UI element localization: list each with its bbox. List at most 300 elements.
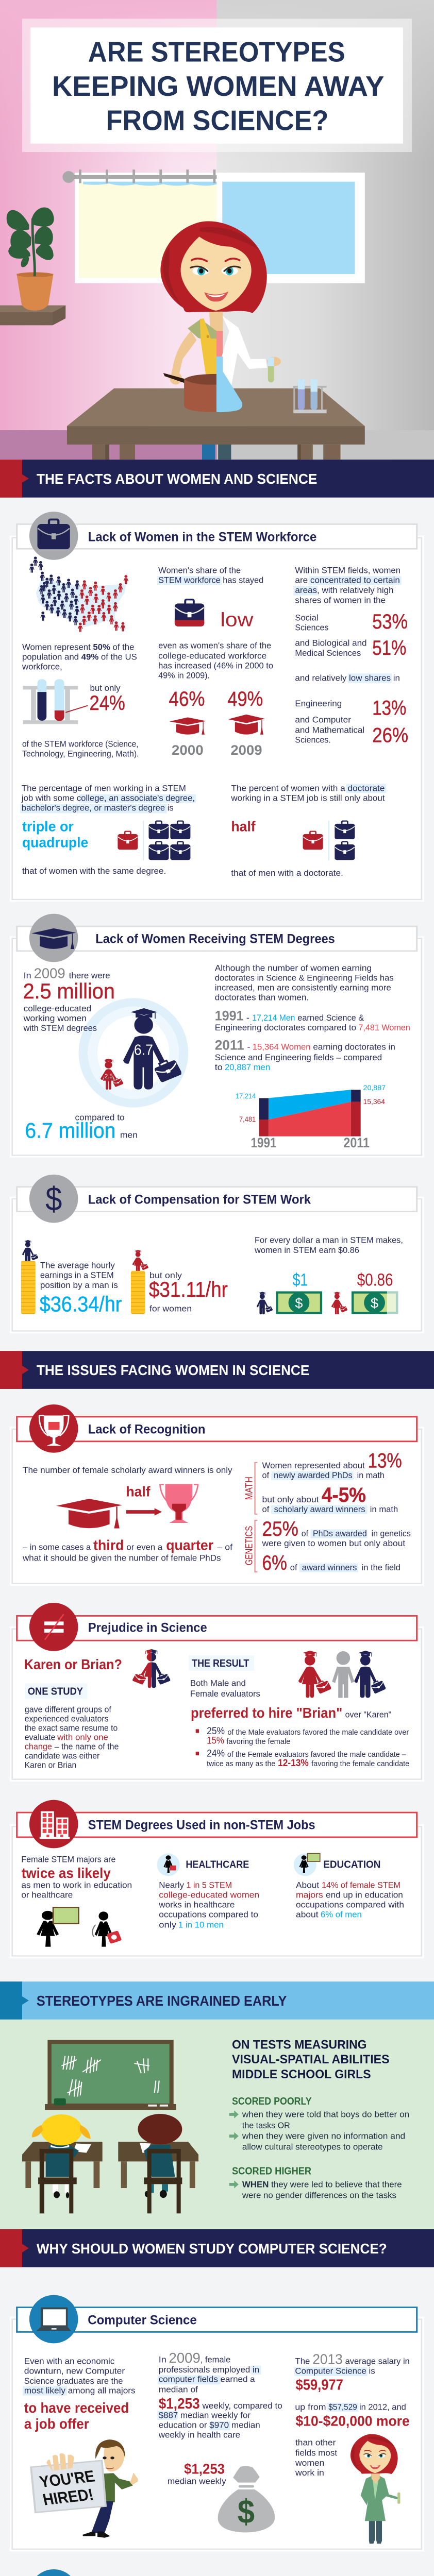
coins: man earnings bbox=[21, 1240, 122, 1316]
text: scored higher: were no gender differences on the tasks bbox=[242, 2191, 396, 2200]
text: preferred to hire Brian bbox=[191, 1705, 409, 1769]
icon: test tubes bbox=[23, 679, 88, 724]
text: doctorates: 1991 bbox=[215, 1008, 244, 1024]
text: 2013 salary: 2013 bbox=[312, 2351, 343, 2367]
text: scored poorly: allow cultural stereotypes to operate bbox=[242, 2142, 383, 2151]
text: concentrated fields: and Biological and bbox=[295, 638, 367, 648]
text: concentrated fields: 13% bbox=[372, 697, 406, 719]
text: health care: weekly in health care bbox=[158, 2431, 240, 2440]
text: scored higher bbox=[229, 2165, 402, 2200]
area chart: doctorates 1991 to 2011: 20,887 bbox=[363, 1084, 386, 1092]
text: than other fields: than other bbox=[295, 2438, 336, 2448]
genetics column: 6% bbox=[262, 1551, 287, 1574]
character: half home half scientist bbox=[170, 308, 281, 460]
text: doctorates: 15,364 Women bbox=[253, 1042, 311, 1052]
text: median weekly earnings: median of bbox=[159, 2384, 198, 2394]
text: doctorates: 17,214 Men bbox=[252, 1013, 295, 1023]
desks bbox=[22, 2142, 198, 2188]
title: ARE STEREOTYPES bbox=[88, 36, 345, 67]
dollar comparison: $1 bbox=[293, 1269, 308, 1290]
text: than other fields: fields most bbox=[295, 2449, 337, 2458]
panel: lack of recognition bbox=[10, 1404, 424, 1586]
title: KEEPING WOMEN AWAY bbox=[52, 70, 384, 102]
heading: tests bbox=[232, 2038, 390, 2081]
text: doctorates: 7,481 Women bbox=[358, 1023, 410, 1032]
healthcare column: 1 in 5 STEM bbox=[186, 1880, 232, 1890]
text: median weekly earnings: professionals employed in bbox=[159, 2365, 259, 2375]
panel header bbox=[17, 2308, 417, 2332]
text: median weekly earnings: computer fields earned a bbox=[159, 2374, 255, 2384]
text: doctorates: doctorates than women. bbox=[215, 992, 309, 1002]
stat: money bag: $1,253 bbox=[184, 2462, 225, 2477]
figure: man and woman scale: 2.5 bbox=[105, 1073, 113, 1080]
heading: Karen or Brian: Karen or Brian? bbox=[24, 1657, 122, 1673]
text: STEM share stayed low: low bbox=[220, 608, 254, 631]
stat: money bag: $ bbox=[238, 2493, 255, 2530]
panel: prejudice in science bbox=[10, 1603, 424, 1782]
stat: 2.5 million bbox=[23, 965, 115, 1033]
text: doctorates: Engineering doctorates compared to bbox=[215, 1023, 356, 1032]
text: doctorates: Although the number of women earning bbox=[215, 963, 372, 973]
icon: teacher and doctor bbox=[37, 1907, 122, 1947]
text: women population share: workforce, bbox=[22, 662, 62, 671]
text: men triple or quadruple: quadruple bbox=[22, 835, 88, 851]
dollar comparison: For every dollar a man in STEM makes, bbox=[255, 1235, 403, 1245]
dollar comparison: $ bbox=[295, 1296, 303, 1311]
text: doctorates: increased, men are consistently earning more bbox=[215, 982, 391, 992]
healthcare column: 1 in 10 men bbox=[178, 1920, 224, 1929]
text: preferred to hire Brian: favoring the female bbox=[226, 1738, 290, 1746]
text: scored poorly bbox=[229, 2095, 409, 2151]
text: preferred to hire Brian: of the Male evaluators favored the male candidate over bbox=[227, 1728, 409, 1737]
window bbox=[62, 170, 365, 283]
education column: EDUCATION bbox=[323, 1859, 380, 1870]
title: FROM SCIENCE? bbox=[106, 105, 328, 136]
text: doctorates: 2011 bbox=[215, 1038, 244, 1053]
panel: lack of women receiving STEM degrees bbox=[10, 914, 424, 1158]
text: 2013 salary: The bbox=[295, 2356, 310, 2366]
text: award winners: what it should be given the number of female PhDs bbox=[22, 1553, 221, 1563]
hero illustration bbox=[0, 0, 434, 460]
icon: not equal bbox=[29, 1603, 78, 1651]
math column bbox=[243, 1449, 402, 1514]
text: median weekly earnings: , female bbox=[201, 2355, 230, 2364]
text: twice as likely bbox=[21, 1855, 132, 1900]
icon: laptop bbox=[29, 2295, 78, 2343]
genetics column: of award winners in the field bbox=[290, 1563, 400, 1572]
text: STEM share stayed low bbox=[157, 566, 273, 680]
panel: classroom section bbox=[0, 2020, 434, 2229]
text: median weekly earnings: $1,253 bbox=[159, 2396, 200, 2412]
panel header: Lack of Compensation for STEM Work bbox=[88, 1192, 311, 1207]
text: concentrated fields: and Mathematical bbox=[295, 725, 364, 735]
text: the result: Female evaluators bbox=[190, 1689, 260, 1699]
text: concentrated fields: Within STEM fields, women bbox=[295, 566, 400, 575]
stat: 2000 vs 2009 caps: 2000 bbox=[172, 743, 204, 758]
text: scored poorly: when they were given no information and bbox=[242, 2131, 405, 2141]
text: concentrated fields: 53% bbox=[372, 610, 408, 633]
text: scored higher: WHEN they were led to believe that there bbox=[242, 2180, 402, 2189]
dollar comparison: women in STEM earn $0.86 bbox=[254, 1245, 359, 1255]
panel header bbox=[17, 1417, 417, 1442]
text: 2013 salary: $59,977 bbox=[296, 2377, 343, 2393]
education column: about bbox=[296, 1909, 319, 1919]
text: median weekly earnings bbox=[158, 2350, 282, 2420]
coins: man earnings: earnings in a STEM bbox=[40, 1270, 114, 1280]
stat: 6.7 million: compared to bbox=[75, 1112, 125, 1122]
section band: issues bbox=[0, 1351, 434, 1389]
panel header bbox=[17, 524, 417, 549]
text: award winners: half bbox=[126, 1484, 151, 1500]
boy student bbox=[138, 2114, 182, 2198]
text: concentrated fields: areas, with relatively high bbox=[295, 585, 394, 595]
coins: woman earnings: for women bbox=[149, 1304, 192, 1313]
education column: 14% of female STEM bbox=[322, 1880, 400, 1890]
stat: 2.5 million: 2.5 million bbox=[23, 979, 115, 1004]
text: concentrated fields: Sciences. bbox=[295, 735, 331, 744]
text: preferred to hire Brian: 24% bbox=[207, 1749, 225, 1759]
text: health care bbox=[158, 2421, 260, 2440]
icon: trophy bbox=[29, 1404, 78, 1453]
area chart: doctorates 1991 to 2011: 17,214 bbox=[236, 1093, 256, 1100]
stat: 2000 vs 2009 caps: 2009 bbox=[230, 743, 262, 758]
panel: STEM degrees in non-STEM jobs bbox=[10, 1800, 424, 1958]
text: 2013 salary bbox=[294, 2351, 410, 2412]
heading: tests: VISUAL-SPATIAL ABILITIES bbox=[232, 2053, 390, 2066]
text: concentrated fields: and Computer bbox=[295, 715, 351, 724]
text: preferred to hire Brian: of the Female evaluators favored the male candidate – bbox=[227, 1751, 406, 1759]
stat: 2000 vs 2009 caps: 49% bbox=[227, 687, 263, 710]
panel header: Lack of Women in the STEM Workforce bbox=[88, 530, 316, 544]
panel header bbox=[17, 1812, 417, 1837]
section band: why computer science bbox=[0, 2229, 434, 2267]
text: doctorate half bbox=[230, 783, 386, 878]
text: doctorates: - bbox=[246, 1013, 249, 1023]
text: job offer bbox=[23, 2356, 136, 2416]
text: one study: ONE STUDY bbox=[28, 1686, 83, 1697]
text: the result: THE RESULT bbox=[192, 1657, 249, 1669]
text: than other fields bbox=[295, 2438, 337, 2478]
icon: briefcase bbox=[29, 512, 78, 560]
text: job offer: Science graduates are the bbox=[24, 2376, 123, 2386]
illustration: hired man: HIRED! bbox=[41, 2485, 95, 2509]
text: than other fields: work in bbox=[295, 2468, 324, 2478]
stat: 24 percent: 24% bbox=[89, 691, 125, 715]
text: one study: candidate was either bbox=[25, 1751, 100, 1760]
dollar comparison: $ bbox=[371, 1296, 378, 1311]
area chart: doctorates 1991 to 2011 bbox=[236, 1084, 386, 1151]
education column: About bbox=[296, 1880, 319, 1890]
icon: dollar: $ bbox=[45, 1180, 62, 1218]
stat: 2.5 million: with STEM degrees bbox=[23, 1023, 97, 1033]
stat: money bag bbox=[168, 2462, 275, 2532]
text: one study: experienced evaluators bbox=[25, 1714, 109, 1723]
text: STEM share stayed low: STEM workforce has stayed bbox=[158, 575, 263, 585]
text: women population share: Women represent 50% of the bbox=[22, 642, 134, 652]
coins: man earnings: $36.34/hr bbox=[40, 1292, 122, 1316]
education column: end up in education bbox=[326, 1890, 403, 1900]
character head bbox=[160, 221, 267, 313]
dollar comparison: $0.86 bbox=[357, 1269, 393, 1290]
text: 2013 salary: average salary in bbox=[345, 2356, 410, 2366]
illustration: woman scientist bbox=[350, 2434, 400, 2544]
text: preferred to hire Brian: 25% bbox=[207, 1726, 225, 1737]
genetics column bbox=[243, 1517, 411, 1574]
text: concentrated fields: Sciences bbox=[295, 623, 329, 632]
text: concentrated fields: are concentrated to certain bbox=[295, 575, 400, 585]
text: preferred to hire Brian: over "Karen" bbox=[345, 1709, 391, 1719]
heading: tests: ON TESTS MEASURING bbox=[232, 2038, 367, 2052]
text: job offer: downturn, new Computer bbox=[24, 2366, 125, 2376]
icon: chart bbox=[29, 2569, 78, 2576]
text: 2013 salary: up from bbox=[295, 2402, 326, 2412]
text: men triple or quadruple bbox=[20, 783, 196, 876]
text: concentrated fields bbox=[293, 566, 408, 747]
text: one study: the exact same resume to bbox=[25, 1723, 118, 1733]
text: doctorates: earned Science & bbox=[297, 1013, 364, 1023]
math column: of newly awarded PhDs in math bbox=[262, 1470, 385, 1480]
plant in pot bbox=[7, 208, 54, 311]
text: scored poorly: the tasks OR bbox=[242, 2121, 290, 2130]
US map of people bbox=[29, 556, 128, 632]
math column: MATH bbox=[243, 1477, 255, 1500]
stat: 2.5 million: college-educated bbox=[24, 1004, 91, 1013]
education column: occupations compared with bbox=[296, 1900, 404, 1909]
text: men triple or quadruple: triple or bbox=[22, 819, 74, 835]
icon: graduation cap bbox=[29, 914, 78, 962]
text: job offer: Even with an economic bbox=[24, 2356, 115, 2366]
text: concentrated fields: Social bbox=[295, 613, 319, 622]
text: scored poorly: SCORED POORLY bbox=[232, 2095, 312, 2107]
stat: 2.5 million: In bbox=[24, 971, 31, 980]
text: twice as likely: twice as likely bbox=[22, 1865, 111, 1881]
stat: 24 percent: Technology, Engineering, Math). bbox=[22, 749, 139, 758]
panel header: Computer Science bbox=[88, 2313, 197, 2327]
panel: lack of women in the STEM workforce bbox=[10, 512, 424, 902]
text: doctorates: Science and Engineering fields – compared bbox=[215, 1053, 382, 1062]
coins: woman earnings: $31.11/hr bbox=[149, 1277, 228, 1301]
coins: woman earnings: but only bbox=[149, 1270, 182, 1280]
stat: 24 percent: but only bbox=[90, 683, 121, 693]
text: men triple or quadruple: that of women with the same degree. bbox=[22, 866, 166, 876]
text: men triple or quadruple: job with some college, an associate's degree, bbox=[21, 793, 195, 803]
text: one study: gave different groups of bbox=[25, 1704, 111, 1714]
healthcare column: occupations compared to bbox=[159, 1909, 258, 1919]
math column: 13% bbox=[368, 1449, 402, 1472]
section band: the facts bbox=[0, 460, 434, 498]
heading: tests: MIDDLE SCHOOL GIRLS bbox=[232, 2067, 371, 2081]
text: preferred to hire Brian: 12-13% bbox=[278, 1758, 309, 1769]
text: doctorate half: The percent of women with a doctorate bbox=[231, 783, 385, 793]
text: scored poorly: when they were told that boys do better on bbox=[242, 2110, 409, 2120]
text: doctorates: 20,887 men bbox=[225, 1062, 270, 1072]
title frame bbox=[22, 19, 412, 152]
stat: 2.5 million: there were bbox=[69, 971, 110, 980]
text: median weekly earnings: In bbox=[159, 2355, 166, 2364]
icon: half and half person bbox=[132, 1649, 171, 1688]
text: STEM share stayed low: college-educated workforce bbox=[158, 651, 266, 660]
stat: 2.5 million: 2009 bbox=[34, 965, 65, 981]
text: award winners: quarter bbox=[166, 1537, 213, 1553]
panel header bbox=[17, 1187, 417, 1211]
text: men triple or quadruple: bachelor's degree, or master's degree is bbox=[22, 803, 174, 812]
text: preferred to hire Brian: favoring the female candidate bbox=[311, 1760, 409, 1768]
section band: stereotypes bbox=[0, 1981, 434, 2020]
text: twice as likely: or healthcare bbox=[21, 1890, 73, 1900]
text: doctorates bbox=[215, 963, 410, 1072]
stat: 24 percent: of the STEM workforce (Science, bbox=[22, 739, 139, 749]
shelf bbox=[0, 306, 65, 325]
coins: woman earnings bbox=[131, 1250, 228, 1314]
genetics column: GENETICS bbox=[243, 1526, 255, 1565]
text: a job offer: a job offer bbox=[24, 2416, 89, 2432]
text: preferred to hire Brian: twice as many as the bbox=[207, 1760, 275, 1768]
coins: man earnings: The average hourly bbox=[40, 1260, 115, 1270]
text: concentrated fields: Engineering bbox=[295, 699, 342, 708]
figure: man and woman scale: 6.7 bbox=[134, 1042, 153, 1058]
text: one study: evaluate bbox=[25, 1732, 55, 1742]
illustration: hired man: YOU'RE bbox=[38, 2467, 96, 2491]
text: job offer: to have received bbox=[24, 2400, 129, 2416]
lower part of computer science panel bbox=[24, 2414, 410, 2544]
panel header: Lack of Recognition bbox=[88, 1422, 205, 1436]
text: concentrated fields: and relatively low shares in bbox=[295, 673, 400, 683]
pot and flask bbox=[163, 357, 242, 412]
genetics column: 25% bbox=[262, 1517, 298, 1540]
area chart: doctorates 1991 to 2011: 1991 bbox=[251, 1136, 277, 1151]
chairs bbox=[38, 2149, 182, 2213]
area chart: doctorates 1991 to 2011: 15,364 bbox=[363, 1098, 385, 1106]
healthcare column: works in healthcare bbox=[158, 1900, 235, 1909]
math column: 4-5% bbox=[322, 1483, 366, 1506]
healthcare column: college-educated women bbox=[159, 1890, 259, 1900]
text: twice as likely: Female STEM majors are bbox=[21, 1855, 115, 1864]
text: job offer: most likely among all majors bbox=[24, 2385, 136, 2395]
coins: man earnings: position by a man is bbox=[40, 1280, 118, 1290]
text: award winners: The number of female scholarly award winners is only bbox=[23, 1465, 232, 1475]
icon: three people bbox=[298, 1651, 386, 1698]
text: doctorate half: half bbox=[231, 819, 256, 835]
healthcare column: only bbox=[159, 1920, 176, 1929]
text: median weekly earnings: 2009 bbox=[169, 2350, 201, 2366]
text: concentrated fields: Medical Sciences bbox=[295, 648, 361, 658]
text: award winners: – of bbox=[218, 1543, 232, 1552]
math column: but only about bbox=[262, 1495, 319, 1504]
panel header bbox=[17, 926, 417, 951]
genetics column: were given to women but only about bbox=[262, 1538, 405, 1548]
text: 2013 salary: Computer Science is bbox=[295, 2366, 375, 2376]
panel header: STEM Degrees Used in non-STEM Jobs bbox=[88, 1818, 315, 1832]
table bbox=[67, 388, 365, 460]
text: men triple or quadruple: The percentage of men working in a STEM bbox=[22, 783, 186, 793]
panel: lack of compensation bbox=[10, 1175, 424, 1333]
panel header: Lack of Women Receiving STEM Degrees bbox=[95, 931, 335, 946]
text: concentrated fields: shares of women in the bbox=[295, 595, 386, 605]
icon: buildings bbox=[29, 1800, 78, 1848]
text: twice as likely: as men to work in education bbox=[21, 1880, 132, 1890]
text: health care: education or $970 median bbox=[159, 2421, 260, 2430]
text: STEM share stayed low: even as women's share of the bbox=[158, 640, 271, 650]
area chart: doctorates 1991 to 2011: 7,481 bbox=[239, 1116, 256, 1124]
panel: computer science bbox=[10, 2295, 424, 2552]
math column: Women represented about bbox=[262, 1461, 365, 1470]
blackboard bbox=[45, 2040, 176, 2110]
text: preferred to hire Brian: preferred to hire "Brian" bbox=[191, 1705, 342, 1721]
stat: 24 percent bbox=[22, 683, 139, 758]
illustration: hired man bbox=[31, 2439, 138, 2538]
text: median weekly earnings: weekly, compared to bbox=[202, 2401, 282, 2411]
panel: closing the gender gap bbox=[10, 2569, 424, 2576]
healthcare column: HEALTHCARE bbox=[186, 1859, 249, 1870]
healthcare column: Nearly bbox=[159, 1880, 184, 1890]
icon: dollar bbox=[29, 1175, 78, 1223]
stat: 2.5 million: working women bbox=[23, 1013, 87, 1023]
text: award winners: third bbox=[93, 1537, 124, 1553]
area chart: doctorates 1991 to 2011: 2011 bbox=[343, 1136, 370, 1151]
text: 2013 salary: in 2012, and bbox=[359, 2402, 406, 2412]
text: one study: with only one bbox=[57, 1732, 108, 1742]
stat: 2000 vs 2009 caps bbox=[169, 687, 265, 758]
text: STEM share stayed low: 49% in 2009). bbox=[158, 670, 210, 680]
text: doctorates: doctorates in Science & Engineering Fields has bbox=[215, 973, 394, 983]
stat: 2000 vs 2009 caps: 46% bbox=[169, 687, 205, 710]
text: award winners bbox=[22, 1465, 232, 1563]
text: the result bbox=[189, 1655, 260, 1699]
text: than other fields: women bbox=[295, 2459, 324, 2468]
text: 2013 salary: $57,529 bbox=[328, 2402, 357, 2412]
text: one study: change bbox=[25, 1742, 52, 1751]
text: concentrated fields: 51% bbox=[372, 636, 406, 659]
title bbox=[52, 36, 384, 136]
stat: 6.7 million: men bbox=[120, 1130, 138, 1140]
dollar comparison bbox=[254, 1235, 403, 1314]
section band: issues: THE ISSUES FACING WOMEN IN SCIENCE bbox=[37, 1363, 309, 1379]
stat: money bag: median weekly bbox=[168, 2477, 226, 2486]
text: scored higher: SCORED HIGHER bbox=[232, 2165, 311, 2177]
education column bbox=[294, 1853, 404, 1919]
figure: man and woman scale bbox=[79, 998, 188, 1108]
math column: of scholarly award winners in math bbox=[262, 1504, 398, 1514]
text: doctorate half: working in a STEM job is still only about bbox=[230, 793, 385, 803]
text: one study bbox=[25, 1683, 119, 1770]
text: award winners: – in some cases a bbox=[23, 1543, 91, 1552]
text: one study: – the name of the bbox=[55, 1742, 119, 1751]
panel header bbox=[17, 1616, 417, 1640]
text: the result: Both Male and bbox=[190, 1679, 246, 1688]
text: doctorate half: that of men with a doctorate. bbox=[231, 868, 343, 878]
text: median weekly earnings: $887 median weekly for bbox=[159, 2411, 251, 2420]
text: one study: Karen or Brian bbox=[25, 1760, 76, 1770]
test tube rack bbox=[293, 379, 327, 413]
genetics column: of PhDs awarded in genetics bbox=[302, 1529, 411, 1538]
text: concentrated fields: 26% bbox=[372, 724, 408, 747]
education column: 6% of men bbox=[321, 1909, 362, 1919]
healthcare column bbox=[157, 1853, 259, 1929]
text: STEM share stayed low: Women's share of the bbox=[158, 566, 241, 575]
education column: majors bbox=[296, 1890, 323, 1900]
stat: 6.7 million: 6.7 million bbox=[25, 1118, 115, 1143]
text: doctorates: earning doctorates in bbox=[313, 1042, 395, 1052]
text: doctorates: - bbox=[247, 1042, 251, 1052]
panel header: Prejudice in Science bbox=[88, 1620, 207, 1635]
text: women population share: population and 49% of the US bbox=[22, 652, 137, 662]
section band: stereotypes: STEREOTYPES ARE INGRAINED EARLY bbox=[37, 1993, 287, 2009]
girl student bbox=[32, 2114, 91, 2198]
text: women population share bbox=[22, 642, 137, 671]
text: award winners: or even a bbox=[126, 1543, 163, 1552]
text: STEM share stayed low: has increased (46% in 2000 to bbox=[158, 661, 273, 670]
text: doctorates: to bbox=[215, 1062, 223, 1072]
